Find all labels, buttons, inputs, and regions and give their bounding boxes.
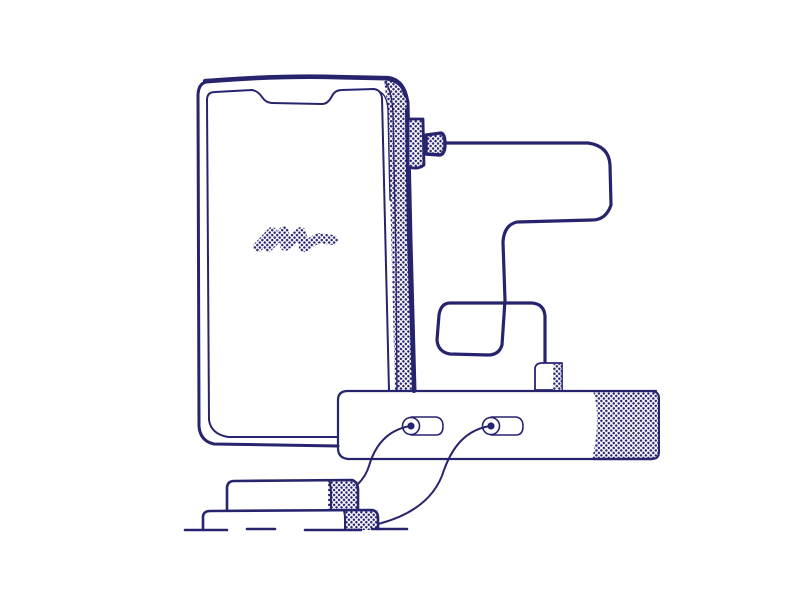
- port two: [482, 417, 523, 435]
- base lower block: [203, 510, 378, 530]
- cable from phone to device: [437, 143, 611, 362]
- device plug: [535, 363, 562, 390]
- device body: [338, 391, 659, 459]
- wire one: [358, 426, 410, 484]
- device shaded end: [592, 391, 659, 459]
- phone outer body: [198, 78, 415, 446]
- base upper block: [227, 480, 358, 510]
- wire two: [378, 426, 490, 524]
- device outline: [338, 391, 656, 459]
- phone: [185, 76, 659, 530]
- phone screen outline with notch: [207, 89, 389, 437]
- port one: [402, 417, 443, 435]
- phone side shading: [384, 81, 416, 392]
- phone screen scribble: [258, 231, 333, 247]
- side button connector: [408, 119, 445, 168]
- ground line: [185, 529, 407, 530]
